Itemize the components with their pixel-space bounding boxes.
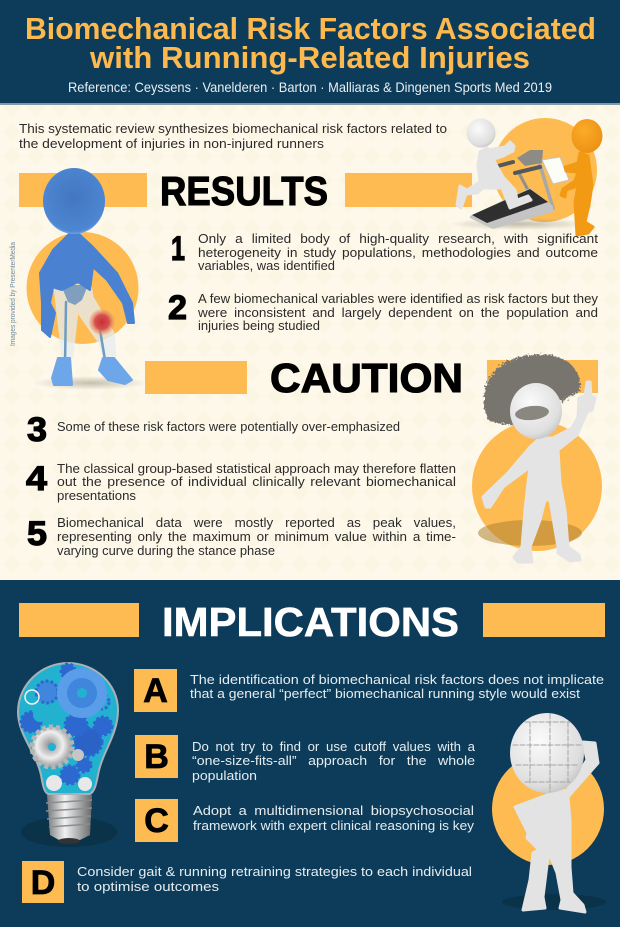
implication A text bbox=[190, 672, 604, 701]
list item 4: The classical group-based statistical approach may therefore flatten bbox=[57, 461, 456, 476]
letter A: A bbox=[143, 672, 168, 710]
icon: light bulb with gears bbox=[18, 663, 118, 847]
body bbox=[483, 382, 595, 562]
list item 5: 5 bbox=[27, 515, 47, 553]
list item 2: injuries being studied bbox=[198, 318, 320, 333]
head bbox=[510, 383, 562, 439]
implication A text: that a general “perfect” biomechanical running style would exist bbox=[190, 686, 580, 701]
list item 3 bbox=[27, 411, 400, 449]
letter D bbox=[22, 861, 64, 903]
letter C bbox=[135, 799, 178, 842]
title bbox=[25, 11, 596, 75]
implications left bar bbox=[19, 603, 139, 637]
list item 1: heterogeneity in study populations, methodologies and outcome bbox=[198, 245, 598, 260]
vertical credit: Images provided by PresenterMedia bbox=[8, 241, 17, 346]
list item 3: Some of these risk factors were potentially over-emphasized bbox=[57, 419, 400, 434]
icon: blue figure with knee pain bbox=[26, 168, 148, 390]
panel: header bbox=[0, 0, 620, 105]
letter B bbox=[135, 735, 178, 778]
list item 2: 2 bbox=[168, 289, 187, 327]
implication D text bbox=[77, 864, 472, 894]
puzzle head bbox=[510, 713, 584, 793]
runner bbox=[457, 142, 531, 208]
screw base bbox=[47, 795, 92, 840]
legs bbox=[55, 285, 115, 360]
feet bbox=[52, 358, 132, 385]
intro text bbox=[19, 121, 447, 151]
list item 3: 3 bbox=[27, 411, 47, 449]
list item 2: were inconsistent and largely dependent on the population and bbox=[197, 305, 598, 320]
head bbox=[43, 168, 105, 234]
list item 1: Only a limited body of high-quality research, with significant bbox=[198, 231, 598, 246]
results left bar bbox=[19, 173, 147, 207]
list item 5: Biomechanical data were mostly reported as peak values, bbox=[57, 515, 456, 530]
icon: puzzle-head thinking figure bbox=[492, 713, 606, 912]
orange figure bbox=[561, 119, 602, 235]
torso and arms bbox=[40, 233, 134, 337]
moustache bbox=[514, 404, 550, 422]
caution right bar bbox=[487, 360, 598, 393]
list item 2 bbox=[168, 289, 599, 333]
implication C text: framework with expert clinical reasoning is key bbox=[193, 818, 475, 833]
reference line: Reference: Ceyssens · Vanelderen · Barton · Malliaras & Dingenen Sports Med 2019 bbox=[68, 79, 552, 95]
caution left bar bbox=[145, 361, 247, 394]
list item 4: out the presence of individual clinically relevant biomechanical bbox=[57, 474, 456, 489]
letter B: B bbox=[144, 738, 169, 776]
list item 1: variables, was identified bbox=[198, 258, 335, 273]
letter A bbox=[134, 669, 177, 712]
letter D: D bbox=[31, 864, 55, 902]
icon: wild-haired pointing figure bbox=[472, 354, 602, 562]
heading: caution: CAUTION bbox=[270, 355, 463, 401]
list item 5: representing only the maximum or minimum value within a time- bbox=[57, 529, 456, 544]
implication B text: “one-size-fits-all” approach for the whole bbox=[192, 753, 475, 768]
hair bbox=[484, 354, 580, 425]
list item 4: presentations bbox=[57, 488, 136, 503]
implication B text bbox=[192, 739, 476, 783]
list item 5: varying curve during the stance phase bbox=[57, 543, 275, 558]
implication A text: The identification of biomechanical risk factors does not implicate bbox=[190, 672, 604, 687]
intro text: This systematic review synthesizes biomechanical risk factors related to bbox=[19, 121, 447, 136]
intro text: the development of injuries in non-injured runners bbox=[19, 136, 325, 151]
treadmill bbox=[470, 150, 553, 229]
heading: implications: IMPLICATIONS bbox=[162, 599, 459, 645]
icon: runner on treadmill with orange figure bbox=[448, 118, 602, 235]
list item 1: 1 bbox=[171, 230, 185, 268]
clipboard bbox=[542, 157, 569, 184]
panel: cream background bbox=[0, 105, 620, 580]
panel: implications bbox=[0, 580, 620, 927]
implication B text: Do not try to find or use cutoff values with a bbox=[192, 739, 476, 754]
implication C text bbox=[193, 803, 475, 833]
implication D text: Consider gait & running retraining strategies to each individual bbox=[77, 864, 472, 879]
title: with Running-Related Injuries bbox=[89, 40, 530, 75]
list item 2: A few biomechanical variables were identified as risk factors but they bbox=[198, 291, 599, 306]
knee pain bbox=[89, 309, 115, 335]
list item 1 bbox=[171, 230, 598, 273]
silver gear bbox=[32, 727, 72, 767]
body bbox=[515, 742, 598, 912]
implication D text: to optimise outcomes bbox=[77, 879, 220, 894]
results right bar bbox=[345, 173, 472, 207]
list item 5 bbox=[27, 515, 456, 558]
heading: results: RESULTS bbox=[160, 168, 328, 214]
implication B text: population bbox=[192, 768, 257, 783]
list item 4 bbox=[26, 460, 456, 503]
letter C: C bbox=[144, 802, 169, 840]
title: Biomechanical Risk Factors Associated bbox=[25, 11, 596, 46]
implication C text: Adopt a multidimensional biopsychosocial bbox=[193, 803, 474, 818]
implications right bar bbox=[483, 603, 605, 637]
list item 4: 4 bbox=[26, 460, 47, 498]
